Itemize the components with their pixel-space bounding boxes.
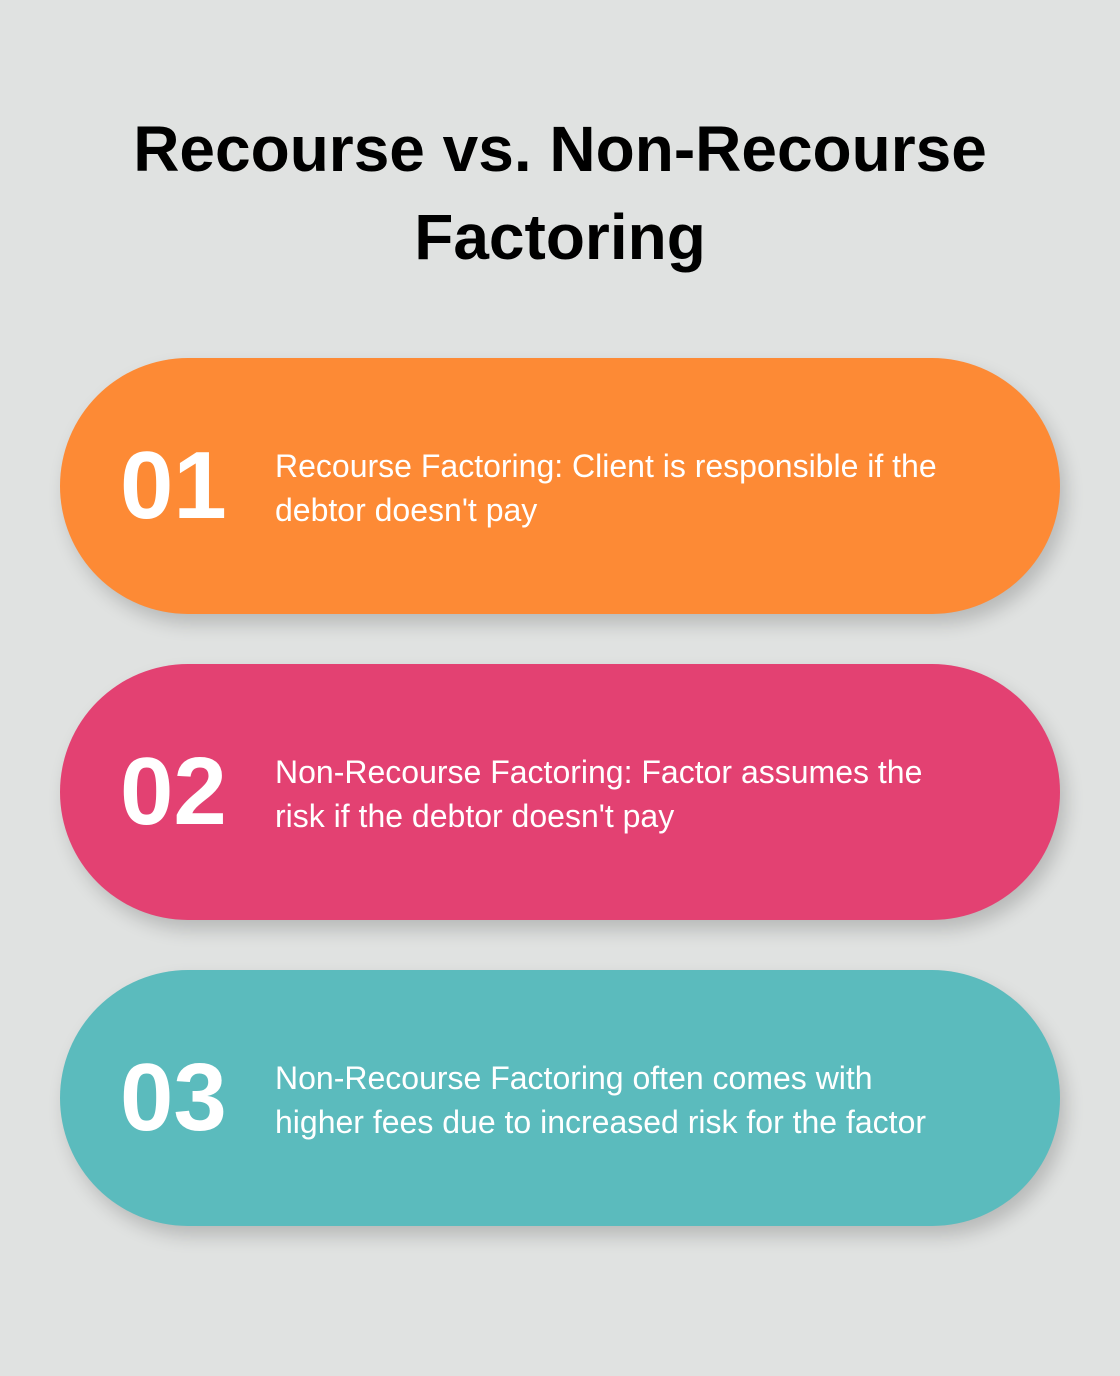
number 02: 02 [120, 738, 227, 845]
panel: item 02 [60, 664, 1060, 920]
title [133, 113, 987, 273]
number 03: 03 [120, 1044, 227, 1151]
title: Recourse vs. Non-Recourse [133, 113, 987, 185]
text 01: Recourse Factoring: Client is responsible if the debtor doesn't pay [275, 448, 937, 528]
panel: item 03 [60, 970, 1060, 1226]
title: Factoring [414, 201, 706, 273]
number 01: 01 [120, 432, 227, 539]
panel: item 01 [60, 358, 1060, 614]
text 03: Non-Recourse Factoring often comes with higher fees due to increased risk for the factor [275, 1060, 926, 1140]
text 02: Non-Recourse Factoring: Factor assumes the risk if the debtor doesn't pay [275, 754, 922, 834]
